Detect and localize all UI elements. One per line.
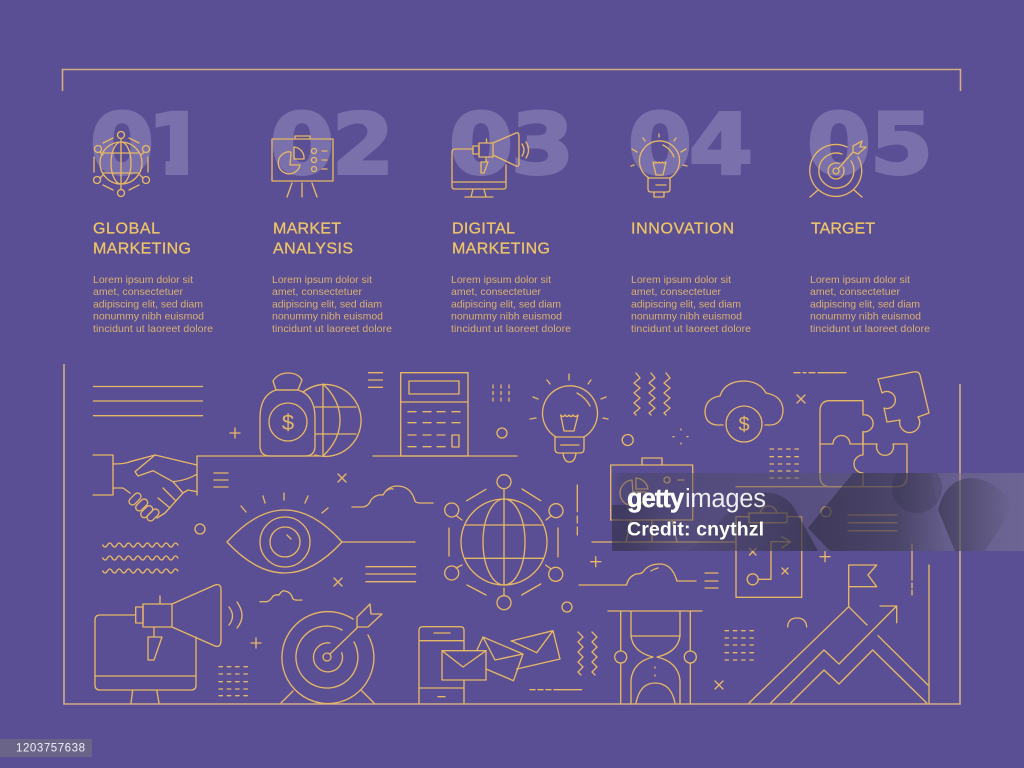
- icon: globe network: [94, 132, 150, 196]
- step 01: global marketing: [90, 96, 213, 335]
- icon: light bulb: [530, 374, 608, 462]
- bottom frame: [64, 364, 960, 704]
- description: amet, consectetuer: [272, 286, 362, 298]
- number 04: [628, 96, 753, 194]
- step 05: target: [807, 96, 933, 335]
- icon: cloud with dollar coin: [705, 381, 783, 442]
- top frame bracket: [62, 70, 960, 91]
- number 01: 1: [148, 96, 206, 194]
- heading: MARKETING: [93, 240, 191, 258]
- icon: money bag with globe: $: [282, 410, 294, 435]
- number 02: [270, 96, 394, 194]
- description: amet, consectetuer: [93, 286, 184, 298]
- icon: calculator: [373, 373, 517, 456]
- number 04: 0: [628, 96, 692, 194]
- icon: light bulb: [631, 134, 687, 197]
- description: Lorem ipsum dolor sit: [451, 274, 551, 286]
- icon: presentation board: [272, 136, 333, 197]
- icon: hourglass: [608, 611, 702, 704]
- description: tincidunt ut laoreet dolore: [451, 323, 571, 335]
- icon: eye: [227, 493, 415, 573]
- icon: target with arrow: [810, 141, 866, 197]
- decorative small elements: [103, 373, 912, 696]
- description: nonummy nibh euismod: [451, 310, 562, 322]
- description: Lorem ipsum dolor sit: [93, 274, 193, 286]
- number 02: 0: [270, 96, 334, 194]
- description: tincidunt ut laoreet dolore: [272, 323, 392, 335]
- icon: presentation board behind watermark: [592, 458, 735, 542]
- description: amet, consectetuer: [810, 286, 900, 298]
- description: Lorem ipsum dolor sit: [810, 274, 910, 286]
- image id badge: 1203757638: [16, 742, 85, 754]
- description: adipiscing elit, sed diam: [93, 298, 203, 310]
- heading: MARKETING: [452, 240, 550, 258]
- number 05: 5: [870, 96, 933, 194]
- getty images logo: getty: [627, 485, 685, 513]
- credit line: Credit: cnythzl: [627, 518, 764, 540]
- description: adipiscing elit, sed diam: [810, 298, 920, 310]
- number 04: 4: [689, 96, 753, 194]
- description: adipiscing elit, sed diam: [272, 298, 382, 310]
- icon: handshake: [93, 455, 320, 522]
- dark shapes: [808, 473, 945, 551]
- description: nonummy nibh euismod: [93, 310, 204, 322]
- number 03: 0: [449, 96, 513, 194]
- number 05: [807, 96, 933, 194]
- description: nonummy nibh euismod: [631, 310, 742, 322]
- icon: phone with envelopes: [419, 627, 560, 703]
- image id badge: [0, 739, 92, 757]
- step 03: digital marketing: [449, 96, 574, 335]
- icon: monitor with megaphone: [95, 585, 242, 703]
- heading: DIGITAL: [452, 220, 515, 238]
- description: adipiscing elit, sed diam: [631, 298, 741, 310]
- description: tincidunt ut laoreet dolore: [810, 323, 930, 335]
- heading: ANALYSIS: [273, 240, 353, 258]
- description: amet, consectetuer: [451, 286, 542, 298]
- icon: three horizontal lines: [94, 386, 202, 416]
- description: tincidunt ut laoreet dolore: [93, 323, 213, 335]
- watermark band: [612, 473, 1024, 551]
- icon: target with arrow: [281, 604, 382, 704]
- icon: mountain with flag and arrow: [749, 565, 929, 703]
- number 01: [92, 110, 188, 176]
- number 02: 2: [332, 96, 394, 194]
- description: Lorem ipsum dolor sit: [631, 274, 731, 286]
- icon: puzzle pieces: [736, 372, 929, 487]
- number 03: [449, 96, 574, 194]
- description: nonummy nibh euismod: [272, 310, 383, 322]
- getty images logo: images: [685, 485, 766, 513]
- step 04: innovation: [628, 96, 753, 335]
- description: nonummy nibh euismod: [810, 310, 921, 322]
- icon: cloud with dollar coin: $: [738, 414, 750, 436]
- number 03: 3: [511, 96, 574, 194]
- number 05: 0: [807, 96, 871, 194]
- heading: MARKET: [273, 220, 341, 238]
- heading: INNOVATION: [631, 220, 734, 238]
- description: adipiscing elit, sed diam: [451, 298, 561, 310]
- description: Lorem ipsum dolor sit: [272, 274, 372, 286]
- illustration panel: [93, 372, 929, 704]
- number 01: 0: [90, 96, 154, 194]
- description: tincidunt ut laoreet dolore: [631, 323, 751, 335]
- icon: monitor with megaphone: [452, 133, 528, 197]
- icon: clipboard: [736, 506, 802, 597]
- icon: network globe: [445, 475, 577, 610]
- step 02: market analysis: [270, 96, 394, 335]
- heading: GLOBAL: [93, 220, 160, 238]
- heading: TARGET: [811, 220, 875, 238]
- description: amet, consectetuer: [631, 286, 722, 298]
- icon: money bag with globe: [260, 373, 361, 456]
